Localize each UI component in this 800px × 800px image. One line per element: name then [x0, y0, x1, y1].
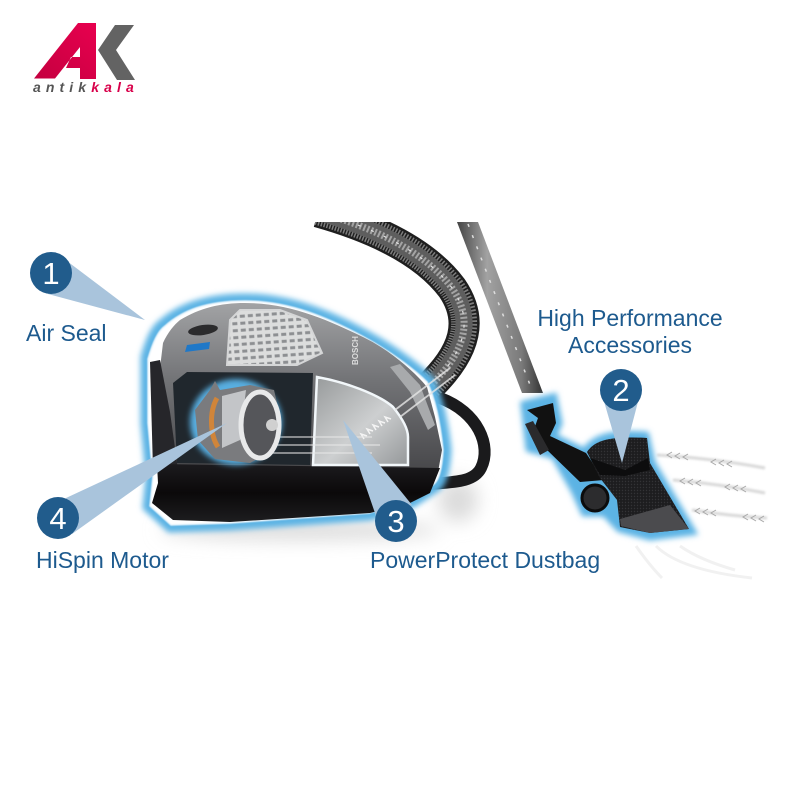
nozzle with blue glow [525, 398, 691, 536]
label: High Performance Accessories: High Performance [537, 305, 723, 331]
flexible hose [318, 212, 464, 388]
dark dial [187, 323, 219, 337]
callout 1 number: 1 [42, 256, 60, 291]
nozzle brush [525, 421, 549, 455]
motor [190, 379, 282, 465]
callout 2 [600, 369, 642, 463]
hose connector stripes [395, 368, 455, 417]
logo wordmark: antikkala [33, 79, 139, 95]
infographic [26, 23, 768, 580]
label: High Performance Accessories: Accessories [568, 332, 692, 358]
callout 4 [37, 423, 227, 539]
motor disc [241, 392, 279, 458]
upper grey shell [157, 303, 442, 472]
nozzle glow [525, 398, 691, 536]
logo letter A [34, 23, 96, 79]
callout 1 [30, 252, 145, 320]
label: HiSpin Motor: HiSpin Motor [36, 547, 169, 573]
vacuum cleaner body [150, 303, 455, 522]
nozzle head [587, 438, 689, 533]
callout 4 badge [37, 497, 79, 539]
brand text on shell: BOSCH [351, 336, 360, 365]
callout 3 badge [375, 500, 417, 542]
nozzle neck [527, 403, 604, 482]
callout 2 pointer [603, 398, 639, 463]
main body blue glow [145, 298, 447, 528]
silver carry handle [390, 364, 435, 430]
callout 2 badge [600, 369, 642, 411]
callout 4 pointer [66, 423, 227, 534]
callout 3 pointer [343, 420, 412, 516]
callout 4 number: 4 [49, 501, 67, 536]
air flow chevrons in bag [361, 417, 391, 439]
air flow lines near nozzle [636, 452, 767, 578]
floor shadows [160, 478, 478, 540]
silver vent grille [227, 310, 322, 365]
motor center [266, 419, 278, 431]
telescopic wand [457, 222, 543, 393]
motor glow [190, 379, 282, 465]
logo letter K [98, 25, 135, 80]
label: Air Seal: Air Seal [26, 320, 107, 346]
black rear handle loop [430, 398, 485, 484]
motor body light [222, 390, 246, 448]
label: PowerProtect Dustbag: PowerProtect Dustbag [370, 547, 600, 573]
lower black base [152, 464, 440, 522]
callout 2 number: 2 [612, 373, 630, 408]
dark interior window [173, 372, 313, 465]
main body white edge [148, 301, 443, 525]
callout 1 badge [30, 252, 72, 294]
callout 1 pointer [48, 252, 145, 320]
motor housing [195, 381, 281, 463]
dust bag [313, 377, 408, 465]
side bumper [150, 360, 178, 470]
logo: antikkala [33, 23, 139, 95]
air flow arcs [270, 437, 380, 453]
callout 3 number: 3 [387, 504, 405, 539]
nozzle wheel [582, 485, 608, 511]
callout 3 [343, 420, 417, 542]
nozzle black cover [590, 458, 650, 476]
motor copper winding [211, 398, 218, 447]
nozzle front plate [620, 505, 689, 533]
blue button [185, 342, 210, 352]
